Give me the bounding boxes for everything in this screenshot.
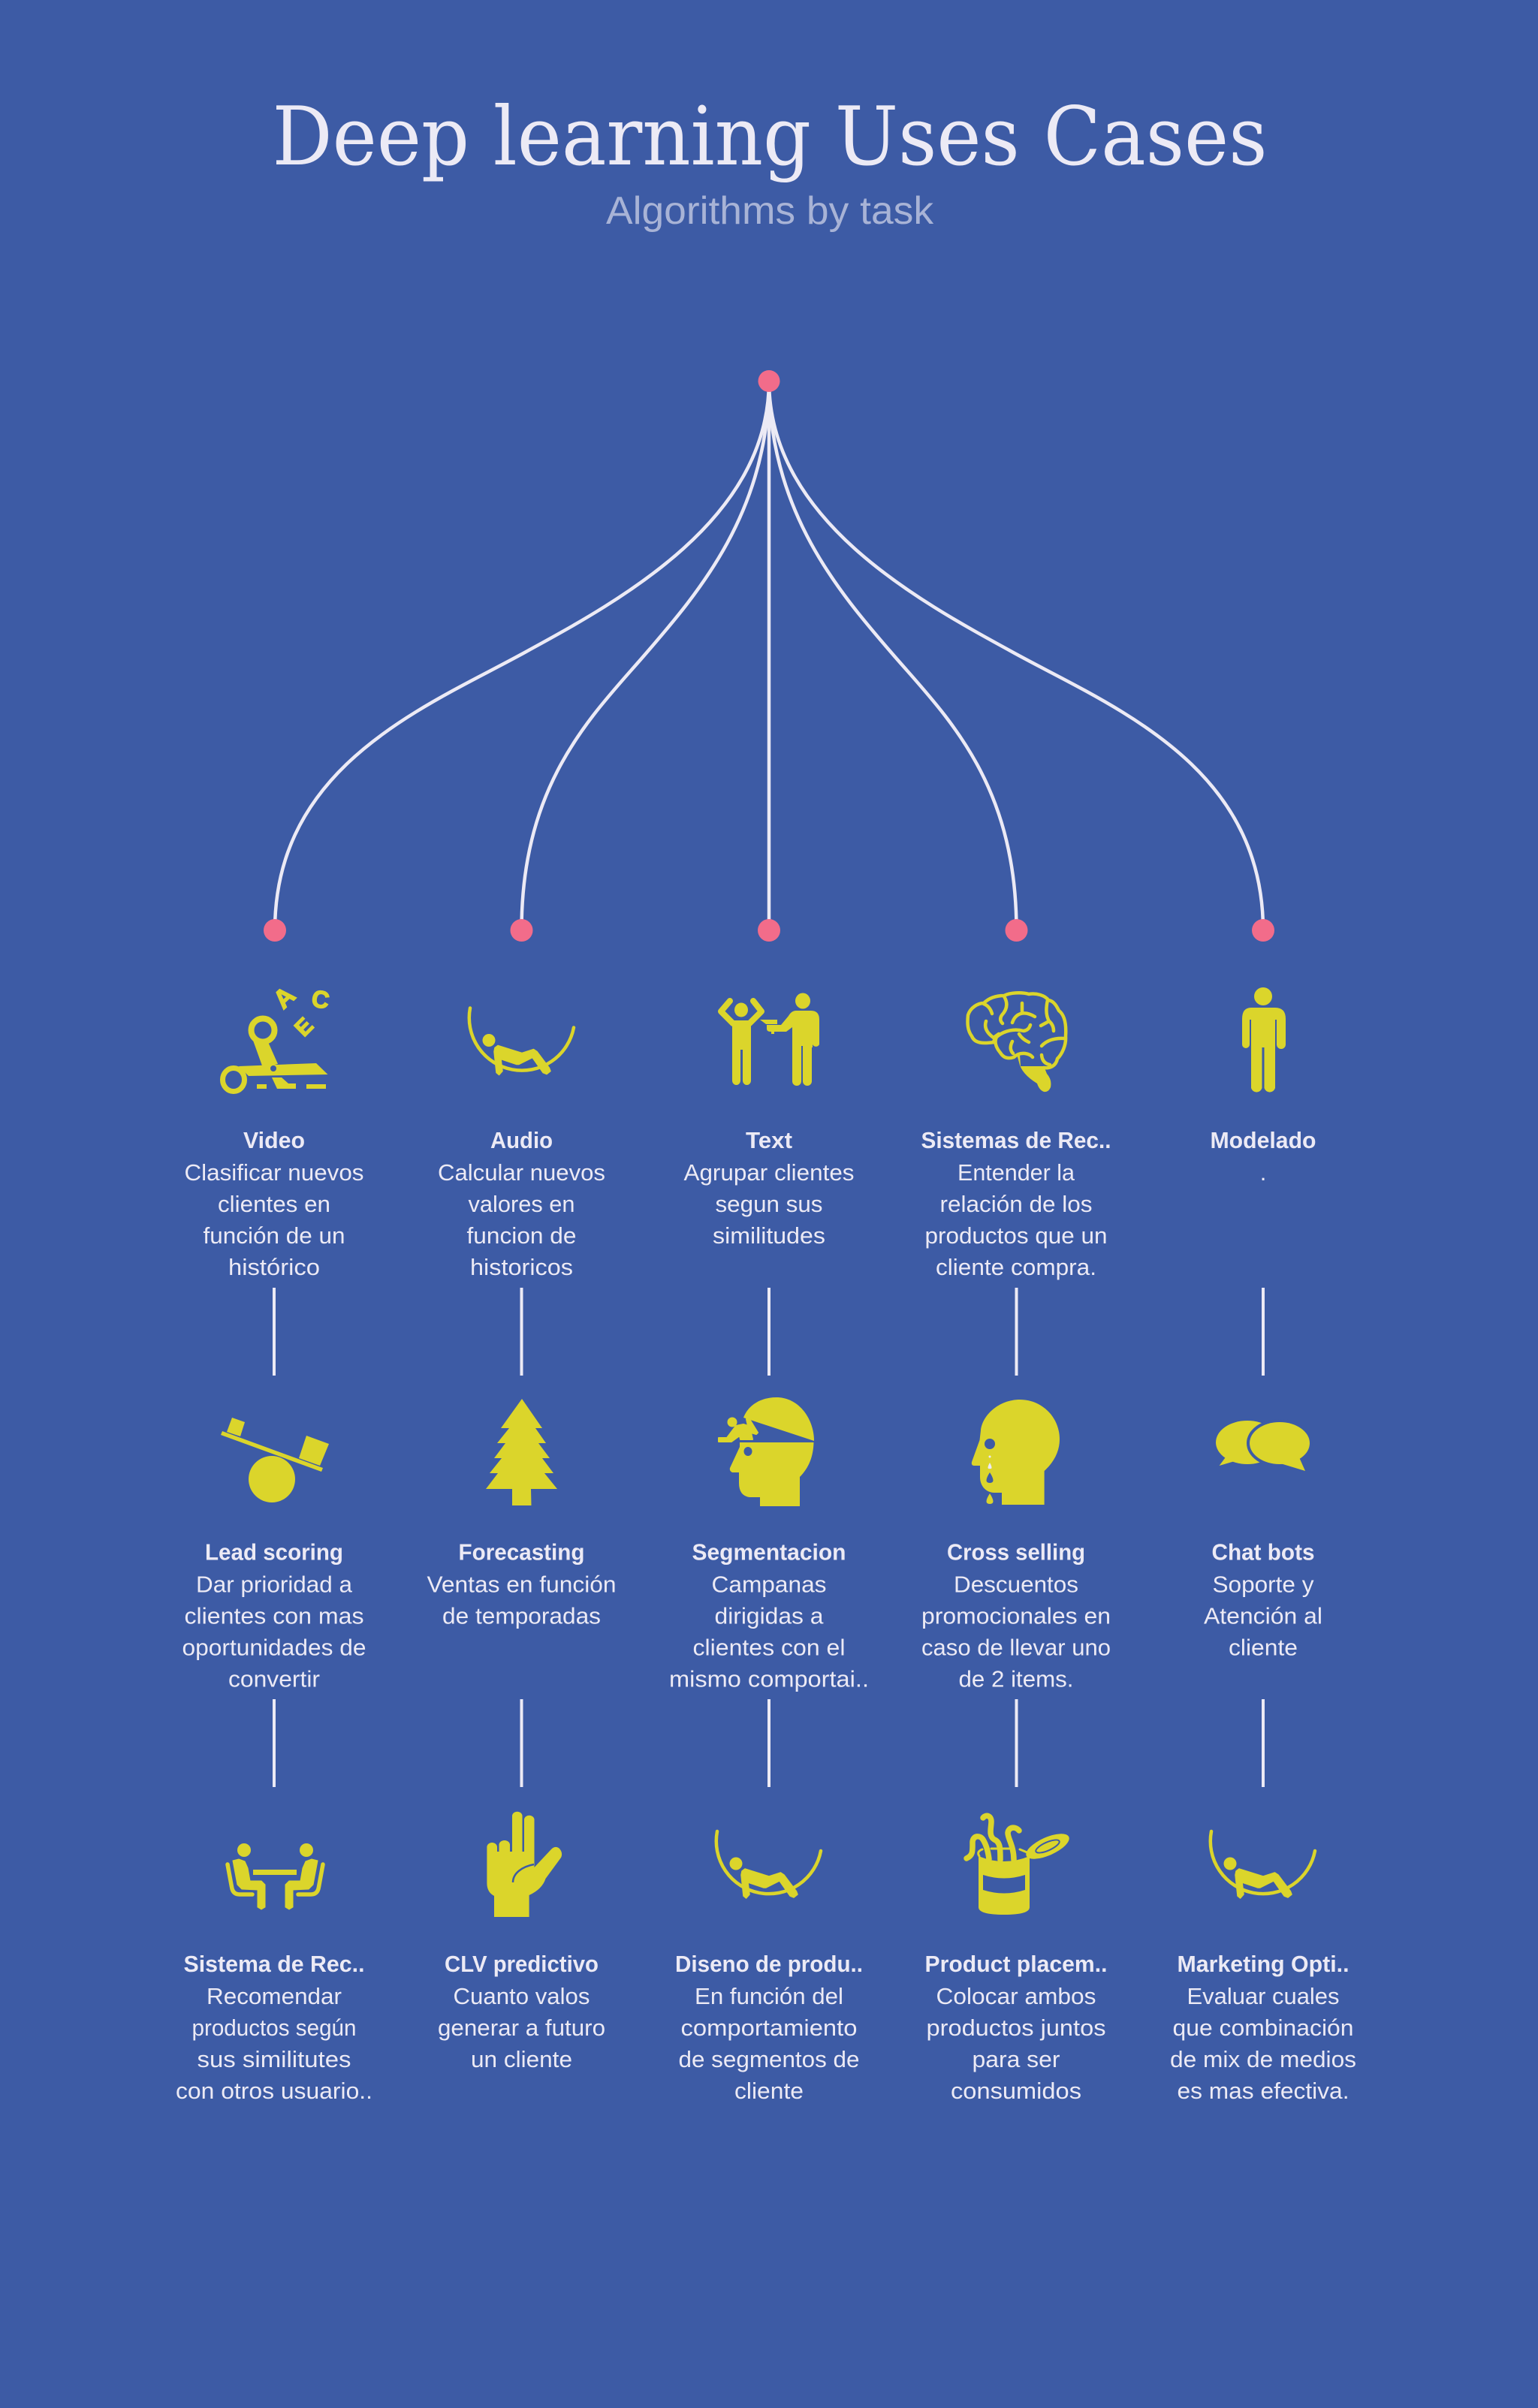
heading: Diseno de produ..: Diseno de produ..	[675, 1951, 863, 1977]
heading: Sistemas de Rec..: Sistemas de Rec..	[921, 1127, 1111, 1153]
description: productos según	[192, 2015, 356, 2041]
description: de mix de medios	[1170, 2046, 1356, 2072]
description: segun sus	[715, 1191, 823, 1217]
vertical connectors between rows	[274, 1288, 1263, 1787]
description: Campanas	[712, 1571, 826, 1598]
description: generar a futuro	[438, 2015, 605, 2041]
description: valores en	[469, 1191, 575, 1217]
description: de 2 items.	[958, 1665, 1074, 1692]
tree diagram: curved branches from the root node	[264, 370, 1274, 942]
description	[669, 1571, 869, 1692]
description: Dar prioridad a	[196, 1571, 353, 1598]
item: Video	[185, 981, 363, 1280]
description	[921, 1571, 1111, 1692]
description	[438, 1983, 605, 2072]
item: Diseno de produ..	[675, 1831, 863, 2104]
icon: standing man	[1242, 987, 1286, 1092]
description: clientes con mas	[185, 1602, 363, 1629]
heading: Audio: Audio	[490, 1127, 553, 1153]
description: historicos	[470, 1254, 573, 1280]
item: Sistemas de Rec..	[921, 993, 1111, 1280]
description	[185, 1159, 363, 1280]
description	[438, 1159, 605, 1280]
description: clientes con el	[692, 1634, 846, 1661]
icon: scissors cutting letters: C	[309, 984, 331, 1014]
icon: speech bubbles	[1216, 1421, 1310, 1471]
icon: two people at a table	[228, 1843, 323, 1909]
description	[1204, 1571, 1322, 1661]
item: Forecasting	[427, 1399, 616, 1629]
description: Recomendar	[207, 1983, 342, 2009]
description: oportunidades de	[182, 1634, 366, 1661]
icon: brain	[968, 993, 1066, 1092]
description: Calcular nuevos	[438, 1159, 605, 1186]
description	[182, 1571, 366, 1692]
heading: Sistema de Rec..: Sistema de Rec..	[183, 1951, 365, 1977]
heading: Video: Video	[243, 1127, 305, 1153]
description: convertir	[228, 1665, 320, 1692]
description	[679, 1983, 859, 2104]
description: consumidos	[951, 2078, 1081, 2104]
description: un cliente	[471, 2046, 572, 2072]
description: Atención al	[1204, 1602, 1322, 1629]
icon: open can of worms	[967, 1816, 1072, 1915]
description: sus similitutes	[197, 2046, 351, 2072]
heading: Modelado: Modelado	[1211, 1127, 1316, 1153]
description: Evaluar cuales	[1187, 1983, 1340, 2009]
description: En función del	[695, 1983, 843, 2009]
description: función de un	[203, 1222, 345, 1249]
description	[925, 1159, 1107, 1280]
description: para ser	[972, 2046, 1060, 2072]
heading: CLV predictivo: CLV predictivo	[445, 1951, 599, 1977]
heading: Chat bots: Chat bots	[1212, 1539, 1314, 1565]
item: CLV predictivo	[438, 1812, 605, 2072]
description: histórico	[228, 1254, 320, 1280]
icon: person in hammock	[716, 1831, 821, 1898]
icon: scissors cutting letters: E	[290, 1013, 318, 1041]
description: cliente	[734, 2078, 804, 2104]
item: Cross selling	[921, 1400, 1111, 1692]
description: que combinación	[1173, 2015, 1353, 2041]
description: caso de llevar uno	[921, 1634, 1111, 1661]
description: similitudes	[713, 1222, 825, 1249]
heading: Product placem..: Product placem..	[925, 1951, 1107, 1977]
description: Cuanto valos	[454, 1983, 590, 2009]
description: funcion de	[467, 1222, 577, 1249]
icon: person in hammock	[469, 1008, 574, 1075]
description: de temporadas	[442, 1602, 601, 1629]
description	[927, 1983, 1105, 2104]
description: productos juntos	[927, 2015, 1105, 2041]
description: cliente compra.	[936, 1254, 1096, 1280]
description: productos que un	[925, 1222, 1107, 1249]
description	[427, 1571, 616, 1629]
description: Clasificar nuevos	[185, 1159, 363, 1186]
description: clientes en	[218, 1191, 330, 1217]
heading: Forecasting: Forecasting	[458, 1539, 584, 1565]
description	[176, 1983, 372, 2104]
icon: raised hand	[487, 1812, 562, 1917]
icon: scissors cutting letters: A	[268, 981, 301, 1014]
heading: Text: Text	[746, 1127, 792, 1153]
item: Marketing Opti..	[1170, 1831, 1356, 2104]
description: Colocar ambos	[936, 1983, 1096, 2009]
item: Product placem..	[925, 1816, 1107, 2104]
description: cliente	[1229, 1634, 1298, 1661]
item: Audio	[438, 1008, 605, 1280]
icon: person in hammock	[1211, 1831, 1315, 1898]
description: relación de los	[940, 1191, 1092, 1217]
title: Deep learning Uses Cases	[272, 90, 1268, 184]
heading: Lead scoring: Lead scoring	[205, 1539, 343, 1565]
icon: crying head	[972, 1400, 1060, 1505]
item: Chat bots	[1204, 1421, 1322, 1661]
item: Text	[683, 993, 855, 1249]
item: Sistema de Rec..	[176, 1843, 372, 2104]
description: dirigidas a	[715, 1602, 824, 1629]
icon: pine tree	[486, 1399, 557, 1505]
description: .	[1260, 1159, 1266, 1186]
heading: Marketing Opti..: Marketing Opti..	[1178, 1951, 1349, 1977]
description: Ventas en función	[427, 1571, 616, 1598]
icon: two men, one held up	[721, 993, 819, 1086]
description: comportamiento	[680, 2015, 858, 2041]
description: Agrupar clientes	[683, 1159, 855, 1186]
description: es mas efectiva.	[1178, 2078, 1349, 2104]
description: Entender la	[957, 1159, 1075, 1186]
heading: Segmentacion: Segmentacion	[692, 1539, 846, 1565]
description: mismo comportai..	[669, 1665, 869, 1692]
item: Segmentacion	[669, 1397, 869, 1692]
item: Lead scoring	[182, 1418, 366, 1692]
description: Descuentos	[954, 1571, 1078, 1598]
icon: open head with figure climbing out	[719, 1397, 814, 1506]
subtitle: Algorithms by task	[606, 189, 934, 233]
description: de segmentos de	[679, 2046, 859, 2072]
description: con otros usuario..	[176, 2078, 372, 2104]
description	[1170, 1983, 1356, 2104]
item: Modelado	[1211, 987, 1316, 1186]
description	[683, 1159, 855, 1249]
icon: scissors cutting letters	[222, 981, 331, 1092]
description: promocionales en	[921, 1602, 1111, 1629]
icon: seesaw with boxes	[221, 1418, 329, 1502]
description: Soporte y	[1212, 1571, 1314, 1598]
heading: Cross selling: Cross selling	[947, 1539, 1085, 1565]
